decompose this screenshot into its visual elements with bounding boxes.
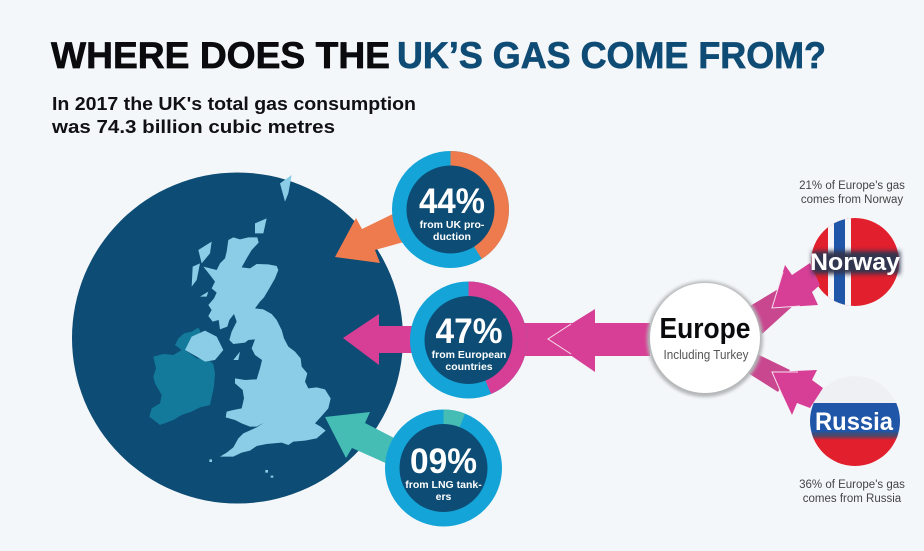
Europe hub circle: Including Turkey: [664, 348, 749, 362]
map: Ireland: [149, 328, 215, 425]
arrow: European countries: [343, 314, 420, 365]
caption: Norway share: comes from Norway: [801, 194, 903, 206]
arrow: Norway to Europe: [750, 263, 820, 334]
ring: 44 percent from UK production: 44%: [419, 182, 485, 221]
Europe hub circle: Europe: [660, 313, 750, 345]
ring: 47 percent from European countries: from European: [432, 349, 506, 361]
map: Great Britain and islands: [185, 175, 331, 478]
ring: 44 percent from UK production: [400, 158, 502, 260]
arrow: UK production: [335, 208, 418, 263]
subtitle: [51, 93, 416, 137]
ring: 09 percent from LNG tankers: 09%: [410, 442, 477, 481]
arrow: LNG tankers: [325, 412, 400, 465]
ring: 47 percent from European countries: countries: [445, 361, 493, 373]
arrow: Russia to Europe: [748, 353, 823, 415]
caption: Russia share: comes from Russia: [803, 493, 902, 505]
flag circle: Norway: [810, 216, 900, 308]
Europe hub circle: [647, 281, 763, 397]
caption: Russia share: 36% of Europe's gas: [799, 479, 905, 491]
caption: Norway share: [799, 180, 905, 206]
map: British Isles: [149, 175, 331, 478]
globe with map of the British Isles: [72, 172, 403, 504]
ring: 47 percent from European countries: [418, 289, 520, 391]
caption: Russia share: [799, 479, 905, 505]
ring: 47 percent from European countries: 47%: [436, 312, 502, 351]
ring: 44 percent from UK production: from UK pro-: [420, 219, 485, 231]
ring: 09 percent from LNG tankers: ers: [436, 491, 452, 503]
ring: 09 percent from LNG tankers: from LNG tank-: [405, 479, 482, 491]
label: Norway: Norway: [810, 249, 901, 276]
flag circle: Russia: [810, 403, 900, 466]
title: WHERE DOES THE: [51, 35, 390, 76]
caption: Norway share: 21% of Europe's gas: [799, 180, 905, 192]
ring: 44 percent from UK production: duction: [433, 231, 471, 243]
subtitle: In 2017 the UK's total gas consumption: [52, 93, 416, 114]
title: UK’S GAS COME FROM?: [397, 35, 826, 76]
label: Russia: Russia: [815, 408, 894, 436]
ring: 09 percent from LNG tankers: [392, 417, 494, 519]
arrow: Europe to ring: [520, 309, 650, 372]
subtitle: was 74.3 billion cubic metres: [51, 116, 335, 137]
title: [51, 35, 826, 76]
